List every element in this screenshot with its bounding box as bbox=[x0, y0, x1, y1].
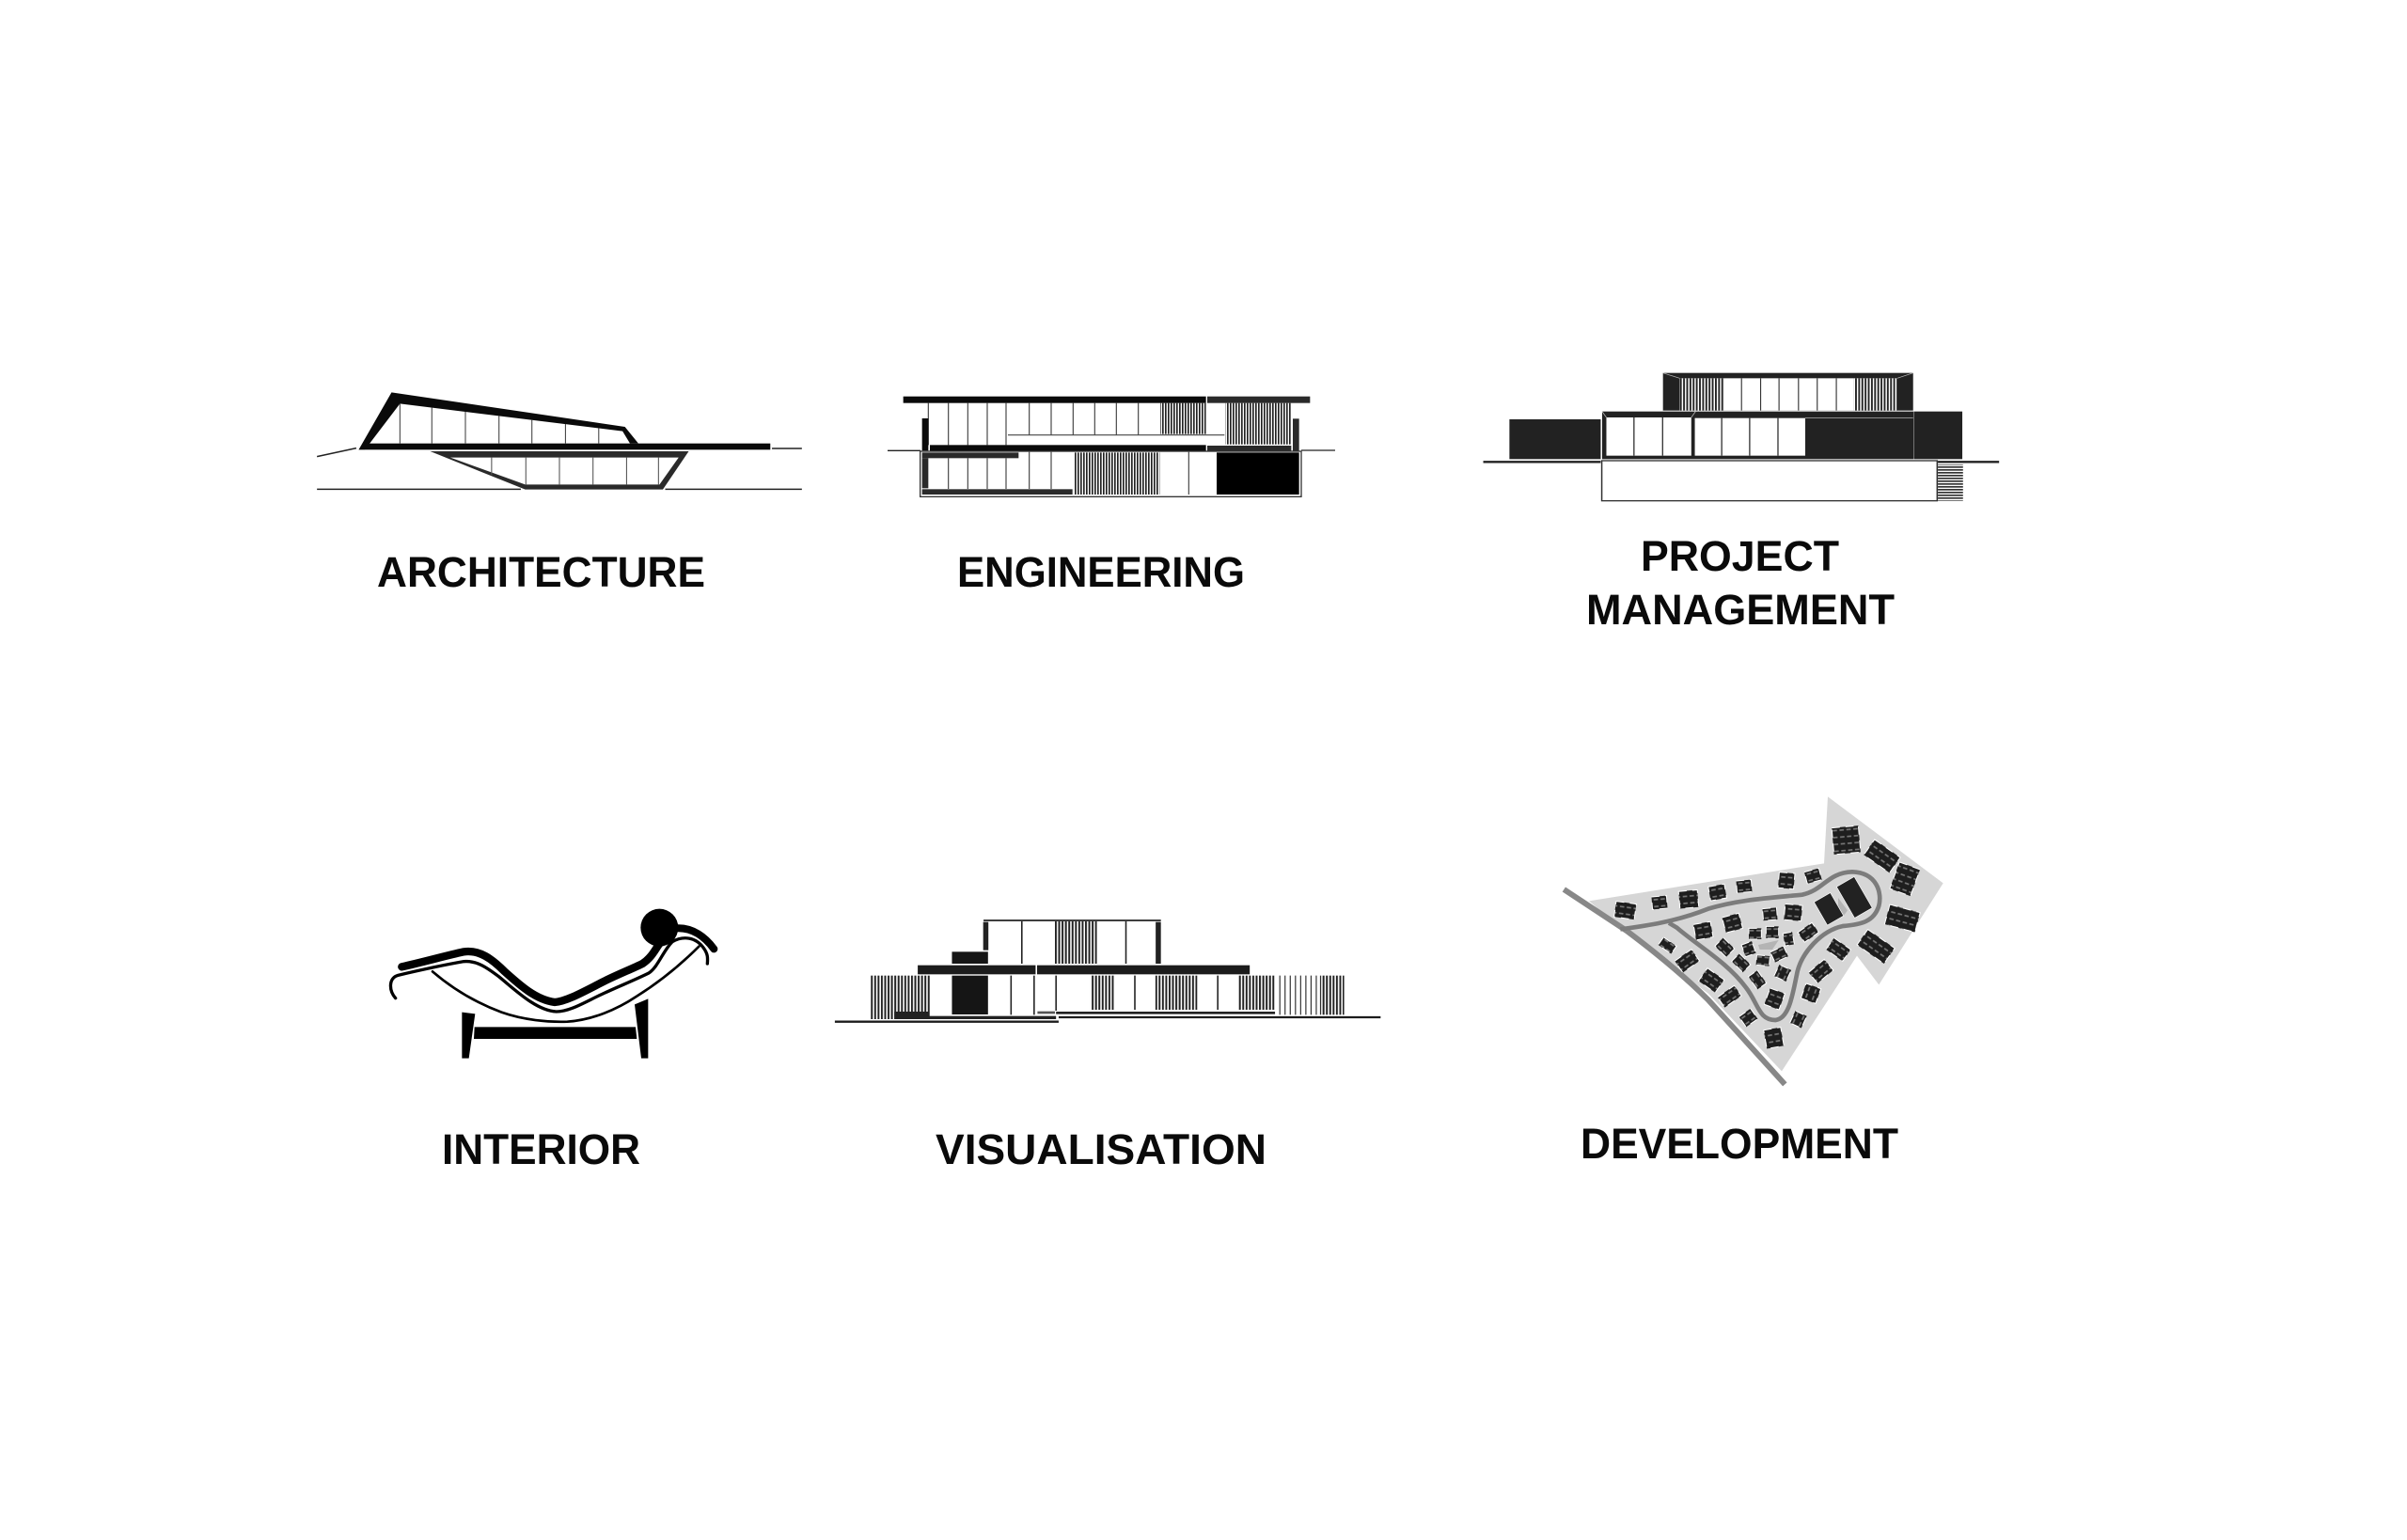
panel: interior bbox=[390, 909, 714, 1173]
label: interior: INTERIOR bbox=[442, 1125, 640, 1173]
icon: architecture section bbox=[317, 392, 802, 490]
central houses bbox=[1814, 876, 1872, 925]
label: visualisation: VISUALISATION bbox=[936, 1125, 1266, 1173]
icon: lounge chair bbox=[390, 909, 714, 1059]
panel: architecture bbox=[317, 392, 802, 596]
houses bbox=[1614, 825, 1920, 1048]
label: development: DEVELOPMENT bbox=[1581, 1120, 1898, 1168]
panel: project management bbox=[1484, 373, 1999, 634]
label: engineering: ENGINEERING bbox=[957, 548, 1245, 596]
panel: visualisation bbox=[835, 920, 1380, 1173]
label: management: MANAGEMENT bbox=[1586, 586, 1895, 634]
icon: engineering section bbox=[888, 397, 1335, 496]
panel: engineering bbox=[888, 397, 1335, 596]
icon: site plan arrow bbox=[1564, 796, 1943, 1084]
icon: visualisation elevation bbox=[835, 920, 1380, 1022]
icon: project management elevation bbox=[1484, 373, 1999, 501]
panel: development bbox=[1564, 796, 1943, 1168]
label: project: PROJECT bbox=[1641, 532, 1839, 580]
label: architecture: ARCHITECTURE bbox=[377, 548, 705, 596]
